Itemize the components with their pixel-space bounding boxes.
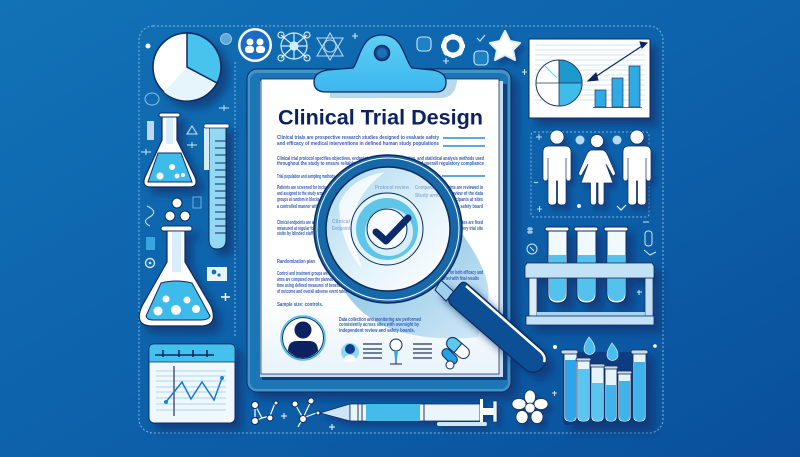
body text: Clinical endpoints are assessed throughout [277,220,345,226]
test tube rack [525,227,654,325]
paper sheet [261,79,499,374]
body text: and efficacy of medical interventions in defined human study populations [277,141,439,147]
body text: across all enrolled participants at sites [413,197,483,203]
faint lens text: Protocol review [375,185,409,191]
body text: parallel with blinded review of the data [413,191,483,197]
rack top and base [525,263,654,278]
droplets [552,290,657,396]
magnifying glass [314,155,546,372]
icon: small flask [144,113,196,187]
icon: star [490,31,520,60]
icon: atom [317,33,343,60]
body text: Sample size: controls. [277,302,324,308]
faint lens text [332,185,441,232]
icon: gear [441,34,465,58]
icon: network [278,32,310,61]
arrow [588,42,647,81]
body text: Endpoints are defined for both efficacy and [413,270,483,276]
body text: independent review and safety boards. [339,328,416,334]
body text: before enrollment starts at every trial site [413,226,483,232]
body text: with interim review by the safety board [412,204,483,210]
icon: pills [440,335,472,369]
icon: chat bubbles [352,33,488,65]
lens [314,155,462,303]
person: man right [623,130,651,205]
title: Clinical Trial Design [278,106,483,130]
icon: people circle [238,28,272,62]
list lines [363,344,432,358]
pie [536,60,582,106]
tube 2 [574,227,598,303]
person: woman [579,134,615,205]
body text: visits by blinded staff and trial reviewers [277,231,345,237]
body text: of outcome and overall adverse event rates [277,289,347,295]
body text: Control and treatment groups are followed for [277,271,347,277]
icon: flower [512,390,548,424]
clipboard board [247,69,511,392]
icon: small avatar [341,343,359,362]
icon: tall test tube [204,124,229,249]
body text: Randomization plan [277,259,315,265]
faint lens text: Comparative [415,185,441,191]
body text: for safety and reported with final results [413,276,479,282]
clip [314,35,457,98]
icon: large flask [139,226,213,326]
handle [435,280,546,372]
icon: participant avatar [281,316,325,360]
icon: molecules [252,398,335,430]
faint lens text: Study arms [415,193,441,199]
clipboard [247,35,511,392]
chart card [529,39,650,118]
bars [593,66,642,108]
tube 3 [604,227,628,303]
body text: a controlled manner with concealed lists [277,204,345,210]
faint lens text: Clinical [332,219,351,225]
faint lens text: Endpoint [332,226,350,232]
body text: Statistical power and error rates are fixed [413,220,483,226]
body text: Clinical trial protocol specifies objectives, endpoints, eligibility, randomization, and statistical analysis methods used [277,156,484,162]
body text: arms are compared over the planned duration [277,277,347,283]
body text: groups at random in blocks across the sites [277,197,345,203]
body text: Clinical trials are prospective research studies designed to evaluate safety [277,135,439,141]
rack back [529,278,537,316]
small left icons [141,34,232,301]
body text: Patients are screened for inclusion criteria [277,185,345,191]
icon: microphone marker [390,339,402,364]
body text: time using defined measures of benefit and [277,283,347,289]
icon: rack side icons [527,227,656,255]
accent lines [442,138,485,176]
body text: throughout the study to ensure reliable outcomes, participant safety, and overall regulatory compliance [277,161,484,167]
tube 1 [545,227,569,303]
person: man left [543,130,571,205]
icon: calendar chart [149,344,235,423]
body text: consistently across sites with oversight by [339,322,419,328]
icon: syringe [320,399,497,426]
bottom test tubes [561,350,648,425]
body text [277,135,484,334]
small people icons [522,69,649,222]
icon: three dots molecule [165,198,190,221]
body text: Trial population and sampling methods [277,174,335,180]
body text: Data collection and monitoring are performed [339,317,421,323]
check mark [376,218,408,241]
body text: Comparative study arms are reviewed in [413,185,483,191]
icon: pie chart [153,33,221,101]
body text: measured at regular follow-up study visits [277,226,345,232]
body text: and assigned to the study arms at enrollment [277,191,345,197]
